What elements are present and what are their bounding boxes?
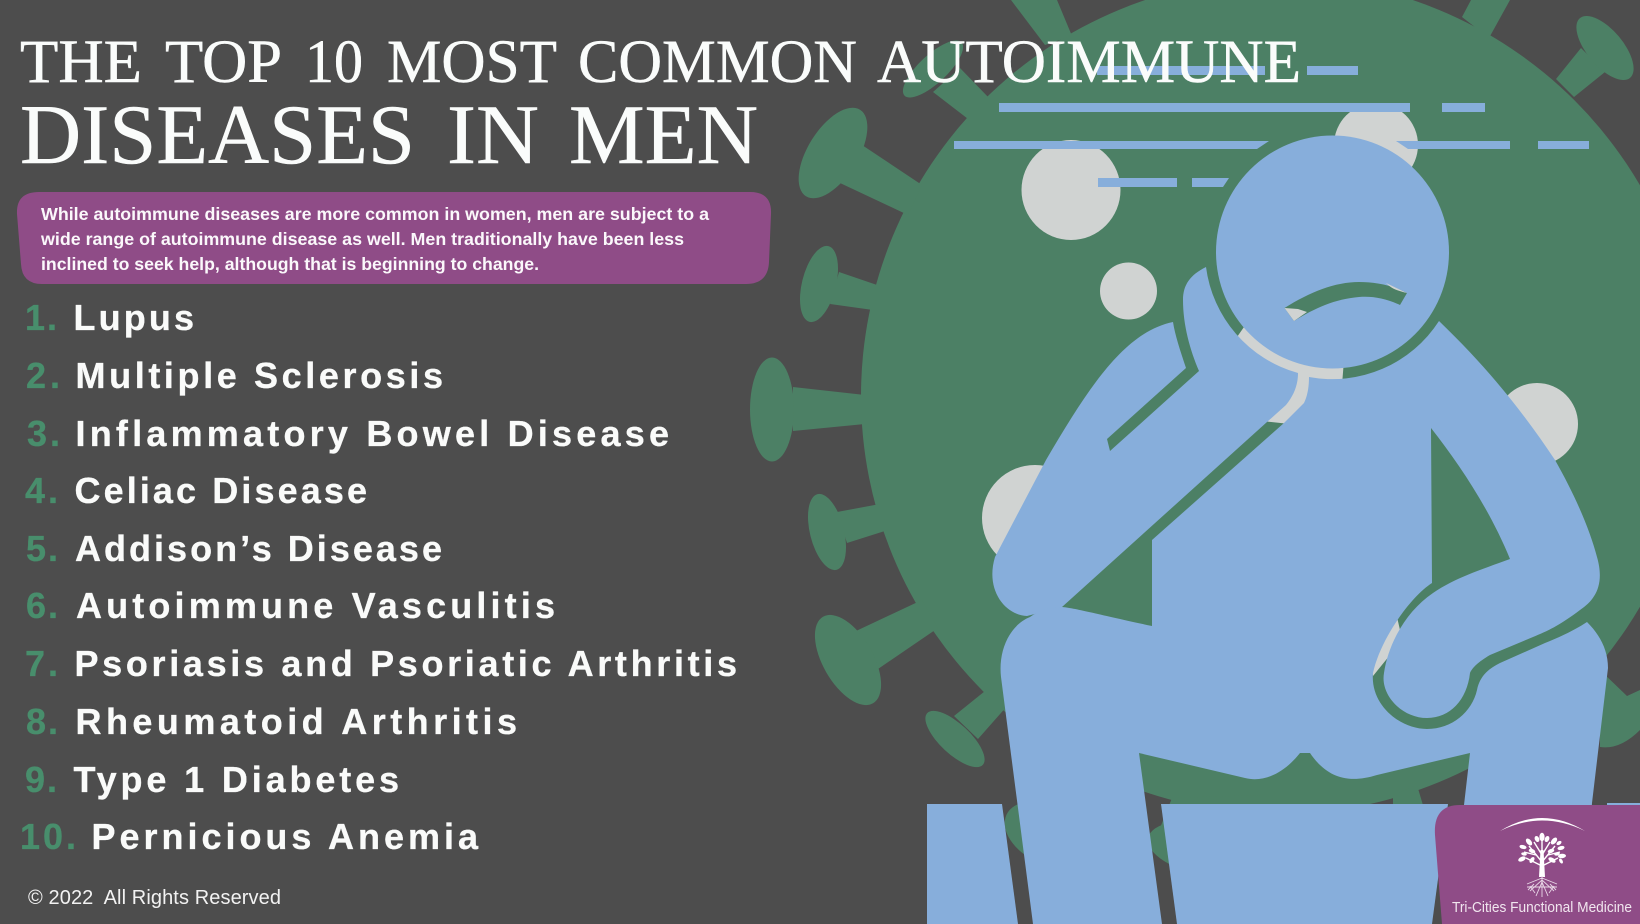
item 6: Autoimmune Vasculitis [76, 585, 555, 626]
figure: arm and hand [992, 267, 1298, 616]
title line 1: MOST [387, 29, 557, 96]
figure: torso and legs [1001, 321, 1608, 924]
title line 2 [20, 88, 758, 182]
title line 1: AUTOIMMUNE [877, 29, 1301, 96]
copyright: © 2022 All Rights Reserved [28, 887, 281, 909]
intro text: While autoimmune diseases are more common in women, men are subject to a [41, 204, 709, 224]
figure: frowning mouth [1284, 282, 1407, 321]
item 1: 1. [25, 297, 57, 338]
item 9: 9. [25, 759, 57, 800]
virus [750, 0, 1640, 889]
dashed lines [954, 66, 1589, 187]
item 2: 2. [26, 355, 60, 396]
item 5: 5. [26, 528, 58, 569]
title line 2: DISEASES [20, 88, 415, 182]
item 8: 8. [26, 701, 58, 742]
item 8: Rheumatoid Arthritis [76, 701, 517, 742]
item 7: Psoriasis and Psoriatic Arthritis [74, 643, 737, 684]
item 3: 3. [27, 413, 60, 454]
thinking figure [992, 136, 1608, 924]
panel: intro callout [17, 192, 771, 284]
figure: head [1216, 136, 1449, 368]
item 4: 4. [25, 470, 58, 511]
intro text: wide range of autoimmune disease as well. Men traditionally have been less [40, 229, 684, 249]
title line 2: IN [447, 88, 539, 182]
title line 1 [20, 29, 1301, 96]
title line 1: 10 [305, 29, 363, 96]
logo arc [1500, 818, 1585, 831]
title [20, 29, 1301, 182]
icon: tree with roots [1517, 833, 1566, 897]
title line 1: TOP [165, 29, 282, 96]
logo panel [1435, 805, 1640, 924]
item 2: Multiple Sclerosis [76, 355, 443, 396]
list of diseases [20, 297, 737, 857]
item 5: Addison’s Disease [75, 528, 442, 569]
item 3: Inflammatory Bowel Disease [76, 413, 669, 454]
item 1: Lupus [74, 297, 194, 338]
intro text [40, 204, 709, 274]
item 10: 10. [20, 816, 76, 857]
virus spots [982, 103, 1578, 676]
item 6: 6. [26, 585, 58, 626]
title line 1: THE [20, 29, 142, 96]
intro text: inclined to seek help, although that is beginning to change. [41, 254, 539, 274]
title line 1: COMMON [578, 29, 857, 96]
title line 2: MEN [569, 88, 758, 182]
item 4: Celiac Disease [74, 470, 367, 511]
item 10: Pernicious Anemia [92, 816, 479, 857]
item 7: 7. [25, 643, 58, 684]
illustration: virus behind thinking figure [750, 0, 1640, 924]
item 9: Type 1 Diabetes [74, 759, 399, 800]
seat blocks [927, 803, 1640, 924]
